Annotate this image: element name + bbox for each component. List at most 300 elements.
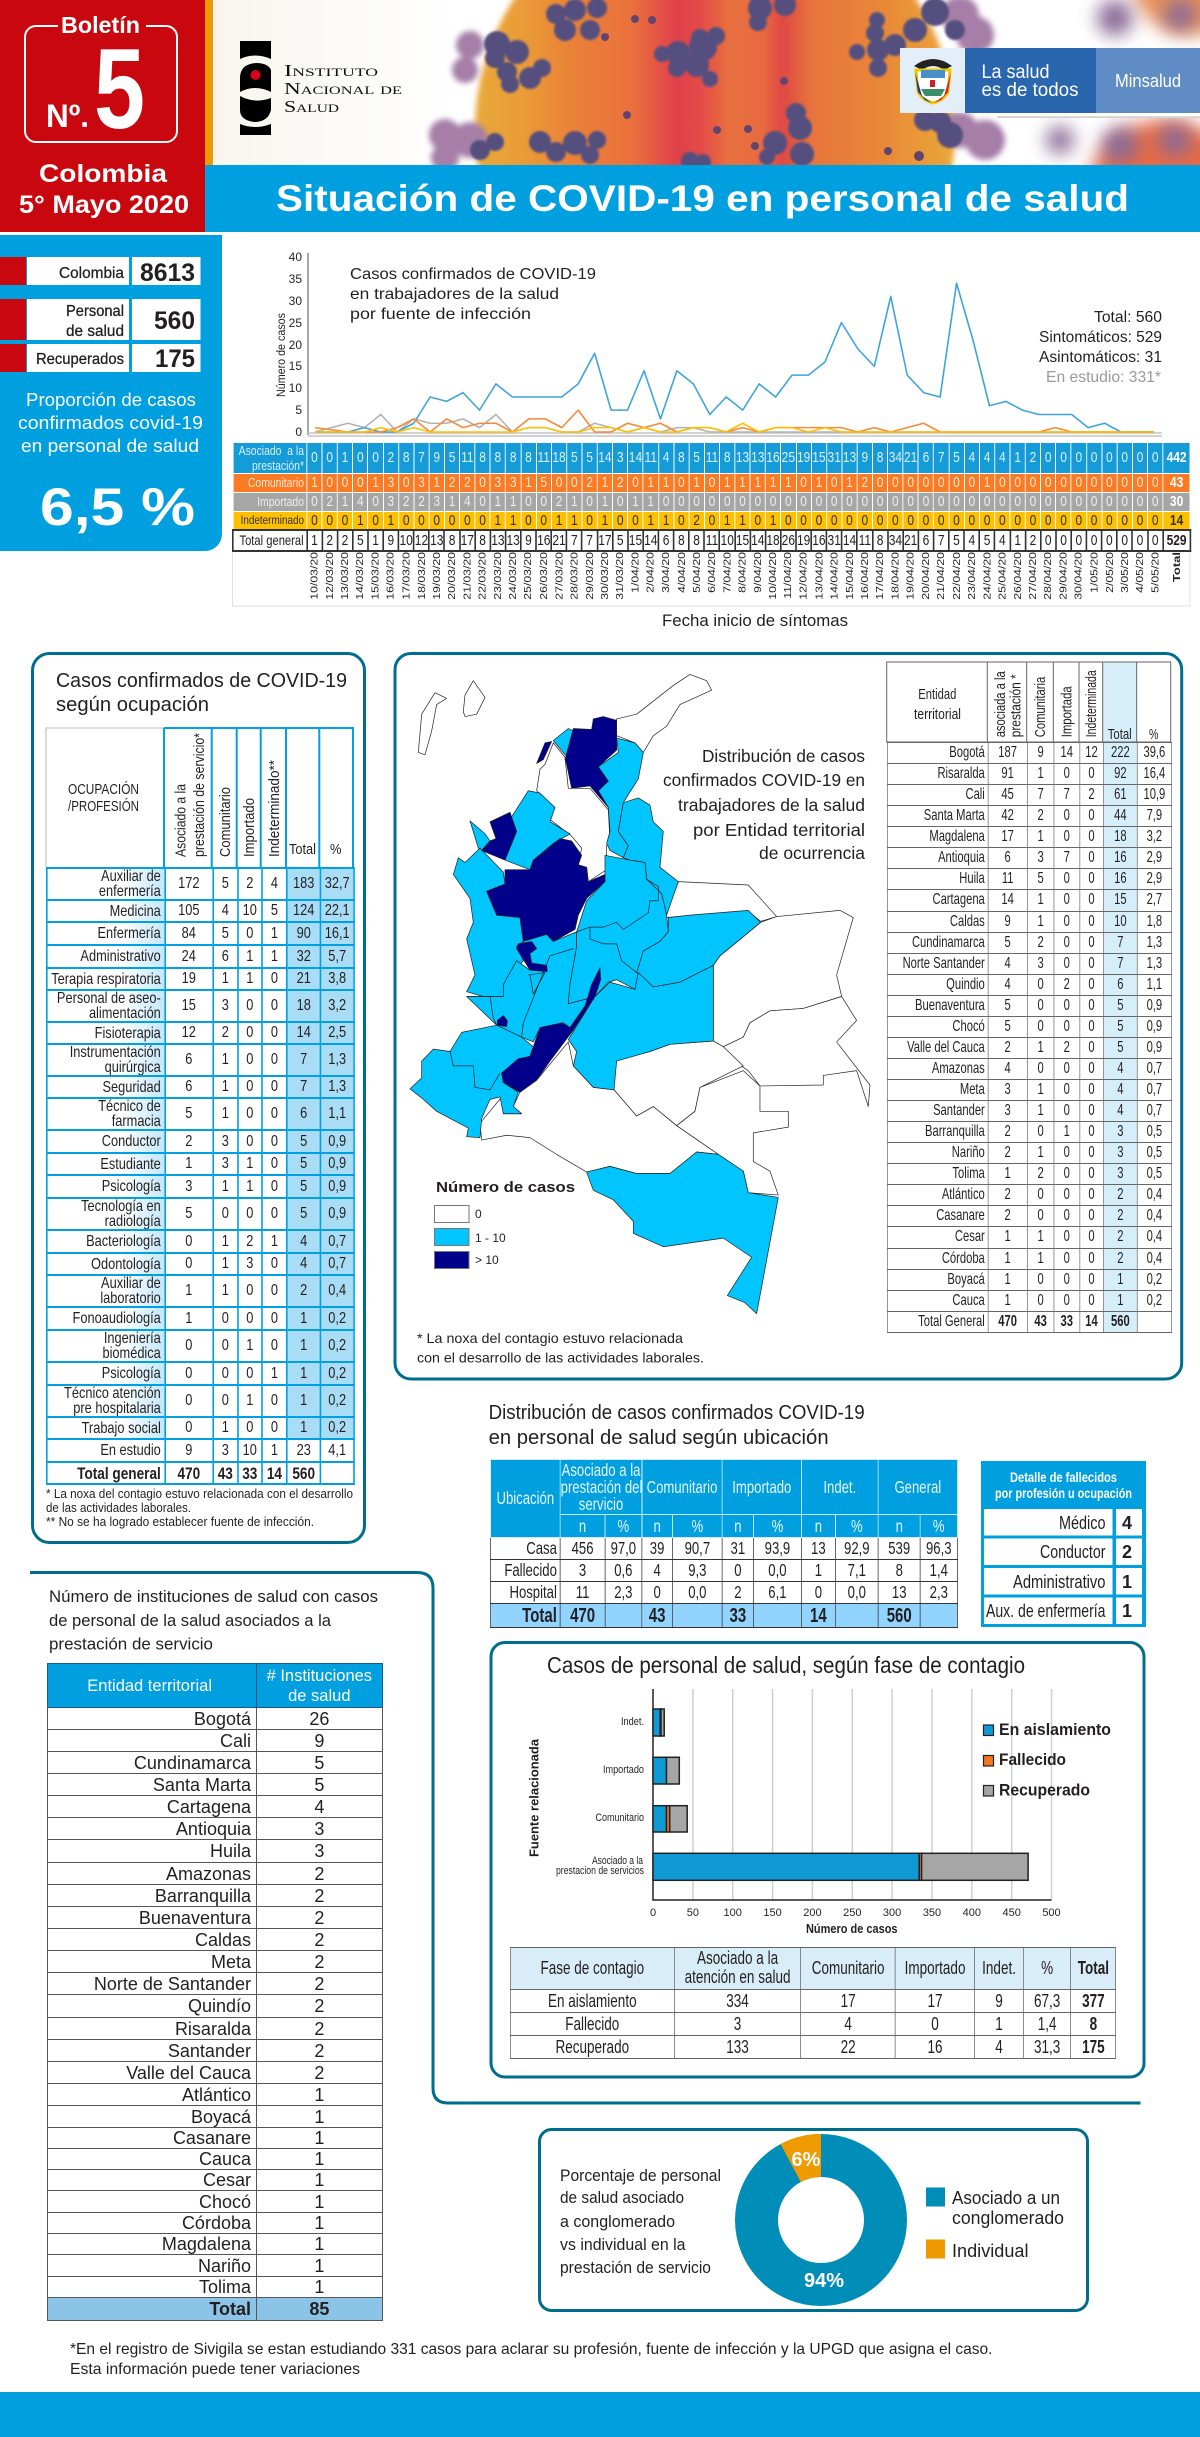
table: daily counts by source: 1 — [632, 493, 639, 510]
table: occupations: 0,4 — [328, 1282, 346, 1299]
territorial table header: % — [1149, 726, 1158, 743]
table: daily counts by source: 0 — [326, 512, 333, 529]
table: cases by territorial entity: 3 — [1004, 1081, 1010, 1098]
table: daily counts by source: 0 — [923, 493, 929, 510]
table: daily counts by source: 0 — [831, 493, 838, 510]
table: institutions: Huila — [210, 1841, 251, 1861]
table: institutions: Cauca — [199, 2149, 251, 2169]
table: occupations: 0 — [271, 1392, 278, 1409]
table: cases by territorial entity: 0 — [1088, 1292, 1094, 1309]
table: daily counts by source: 0 — [525, 512, 532, 529]
table: cases by territorial entity: 0 — [1088, 1060, 1094, 1077]
table: occupations: 19 — [181, 970, 196, 987]
table: cases by territorial entity: 0 — [1088, 1081, 1094, 1098]
table: daily counts by source: 5 — [586, 449, 593, 466]
table: daily counts by source: 0 — [1045, 512, 1052, 529]
table: daily counts by source: 25 — [782, 449, 795, 466]
line chart: cases by source of infection: 10 — [289, 381, 302, 395]
table: cases by territorial entity: 0 — [1063, 828, 1070, 845]
table: cases by territorial entity: 0 — [1063, 1228, 1070, 1245]
table: daily counts by source: 1 — [816, 474, 822, 491]
map legend: > 10 — [475, 1253, 499, 1267]
table: cases by territorial entity: Antioquia — [938, 849, 984, 866]
table: daily counts by source: 3/04/20 — [660, 552, 672, 593]
table: daily counts by source: 26 — [782, 532, 795, 549]
description text: de salud asociado — [560, 2188, 684, 2207]
heading: Distribución de casos confirmados COVID-19 — [489, 1402, 865, 1424]
table: daily counts by source: 11 — [859, 532, 871, 549]
table: daily counts by source: 23/04/20 — [966, 552, 977, 600]
table: cases by territorial entity: 6 — [1004, 849, 1010, 866]
table: daily counts by source: 10/04/20 — [767, 552, 779, 600]
table: daily counts by source: 11/04/20 — [783, 552, 794, 599]
table: daily counts by source: 0 — [1121, 493, 1128, 510]
red bulletin block: Nº. — [46, 98, 89, 134]
stacked bar chart: 200 — [803, 1907, 822, 1919]
table: daily counts by source: 0 — [724, 493, 731, 510]
panel: cases by occupation — [31, 652, 366, 1544]
table: daily counts by source: 1 — [754, 474, 761, 491]
table: daily counts by source: 1 — [739, 512, 746, 529]
table: contagion phase: 3 — [734, 2014, 742, 2034]
line chart: cases by source of infection: 25 — [289, 316, 302, 330]
table: daily counts by source: 0 — [617, 512, 624, 529]
table: occupations: 0 — [221, 1364, 229, 1382]
table: location: Hospital — [509, 1582, 556, 1602]
table: cases by territorial entity: Córdoba — [942, 1250, 984, 1267]
line chart: cases by source of infection — [276, 250, 1162, 439]
table: institutions: Córdoba — [182, 2213, 251, 2233]
stacked bar chart: Asociado a la — [592, 1855, 644, 1867]
table: location: 8 — [895, 1560, 902, 1580]
table: occupations: 0 — [246, 1205, 253, 1222]
table: location: Casa — [526, 1538, 556, 1558]
table: daily counts by source: 4 — [464, 493, 471, 510]
table: occupations: 4 — [300, 1255, 307, 1272]
table: occupations: 0 — [271, 997, 278, 1014]
table: daily counts by source: 28/04/20 — [1043, 552, 1054, 600]
table: daily counts by source: 529 — [1167, 532, 1187, 549]
table: institutions: 2 — [314, 1974, 324, 1994]
line chart: cases by source of infection: Número de casos — [276, 313, 288, 397]
table: daily counts by source: 4/04/20 — [676, 552, 687, 593]
table: daily counts by source: 18 — [766, 532, 780, 549]
table: daily counts by source: 9/04/20 — [752, 552, 763, 593]
table: daily counts by source: 17/04/20 — [874, 552, 886, 600]
table: daily counts by source: 2 — [1030, 449, 1036, 466]
table: cases by territorial entity: 11 — [1002, 870, 1013, 887]
table: cases by territorial entity: 33 — [1060, 1313, 1073, 1330]
donut legend: Individual — [952, 2241, 1028, 2261]
table: occupations: Auxiliar de — [101, 1275, 160, 1292]
table: daily counts by source: 0 — [678, 493, 685, 510]
box heading: por profesión u ocupación — [995, 1485, 1132, 1501]
table: cases by territorial entity: 0,9 — [1146, 1018, 1162, 1035]
chart title: Casos confirmados de COVID-19 — [350, 266, 596, 283]
table: daily counts by source: 0 — [311, 512, 318, 529]
table: contagion phase: 17 — [928, 1991, 943, 2011]
table: cases by territorial entity: 0 — [1063, 1250, 1070, 1267]
row: Administrativo 1: Administrativo — [1013, 1572, 1106, 1592]
table: location: 97,0 — [610, 1538, 636, 1558]
table: daily counts by source: 1 — [510, 493, 517, 510]
table: cases by territorial entity: Cauca — [952, 1292, 984, 1309]
table: daily counts by source: 0 — [1060, 532, 1067, 549]
figure: recuperados 175: 175 — [155, 345, 195, 373]
table: institutions: 1 — [314, 2277, 324, 2297]
table: cases by territorial entity: 0 — [1063, 1144, 1070, 1161]
table: contagion phase: 133 — [727, 2037, 749, 2057]
table: location: 3 — [578, 1560, 586, 1580]
table: daily counts by source: 0 — [678, 512, 685, 529]
table: institutions: Caldas — [195, 1930, 251, 1950]
table: institutions: Buenaventura — [139, 1908, 251, 1928]
table: daily counts by source: 31 — [828, 532, 841, 549]
table: contagion phase: 22 — [841, 2037, 856, 2057]
table: daily counts by source: 2 — [693, 512, 700, 529]
table: cases by territorial entity: Risaralda — [937, 765, 984, 782]
table: daily counts by source: 10 — [399, 532, 413, 549]
table: contagion phase: 31,3 — [1034, 2037, 1061, 2057]
table: occupations: 22,1 — [324, 902, 349, 919]
table: location: Ubicación — [496, 1488, 554, 1508]
table: institutions: 2 — [314, 1886, 324, 1906]
table: occupations: 5 — [300, 1132, 307, 1150]
table: occupations: 0 — [185, 1364, 192, 1382]
table: daily counts by source: 15/04/20 — [844, 552, 855, 600]
table: daily counts by source: 1 — [342, 449, 348, 466]
table: daily counts by source: 29/03/20 — [584, 552, 595, 600]
table: daily counts by source: 0 — [540, 493, 547, 510]
table: daily counts by source: 0 — [785, 512, 792, 529]
table: daily counts by source: 0 — [1091, 474, 1097, 491]
table: occupations: 0 — [271, 1205, 278, 1222]
table: daily counts by source: 0 — [1121, 512, 1128, 529]
table: cases by territorial entity: Cundinamarca — [912, 934, 984, 951]
table: daily counts by source: 12/04/20 — [798, 552, 809, 600]
table: contagion phase: Total — [1078, 1958, 1109, 1978]
table: daily counts by source: 0 — [754, 493, 761, 510]
table: occupations: 1 — [300, 1419, 307, 1436]
table: location: % — [850, 1516, 862, 1536]
table: daily counts by source: 1 — [602, 474, 608, 491]
table: cases by territorial entity: 222 — [1111, 744, 1129, 761]
table: daily counts by source: 0 — [800, 474, 807, 491]
figure: recuperados 175 — [0, 344, 200, 373]
table: daily counts by source: 0 — [1152, 474, 1159, 491]
table: occupations: 12 — [181, 1024, 196, 1041]
table: daily counts by source: 1 — [372, 474, 379, 491]
table: daily counts by source: 0 — [1030, 493, 1036, 510]
table: daily counts by source: 1 — [311, 474, 318, 491]
table: daily counts by source: 20/04/20 — [920, 552, 931, 600]
stacked bar chart: 150 — [763, 1907, 782, 1919]
table: occupations: 0 — [246, 1132, 253, 1150]
table: occupations: 0,2 — [328, 1392, 346, 1409]
table: daily counts by source: 1 — [525, 474, 532, 491]
table: cases by territorial entity: 0,7 — [1146, 1060, 1162, 1077]
table: institutions: 1 — [314, 2149, 324, 2169]
table: location: % — [691, 1516, 703, 1536]
table: daily counts by source: 4 — [663, 449, 669, 466]
table: location: 2,3 — [929, 1582, 947, 1602]
table: daily counts by source: 4 — [984, 449, 990, 466]
table: daily counts by source: 6 — [923, 449, 929, 466]
table: occupations: 43 — [217, 1464, 233, 1482]
table: location: 0,0 — [768, 1560, 786, 1580]
table: daily counts by source: 0 — [907, 474, 914, 491]
table: daily counts by source: 2 — [326, 493, 333, 510]
table: occupations: 0 — [271, 1024, 278, 1041]
table: daily counts by source: 8 — [877, 532, 883, 549]
table: location: 13 — [811, 1538, 825, 1558]
row: Médico 4: 4 — [1122, 1513, 1132, 1533]
table: occupations: 2 — [221, 1024, 229, 1041]
table: daily counts by source: 1 — [342, 493, 348, 510]
table: daily counts by source: 0 — [1091, 449, 1097, 466]
table: cases by territorial entity: 1 — [1004, 1165, 1010, 1182]
table: daily counts by source: 3/05/20 — [1119, 552, 1130, 593]
table: cases by territorial entity: 0,5 — [1146, 1144, 1162, 1161]
table: occupations: 0 — [185, 1337, 192, 1354]
table: occupations: Conductor — [101, 1133, 160, 1150]
table: daily counts by source: 1 — [357, 512, 364, 529]
table: occupations: 105 — [178, 902, 199, 919]
table: cases by territorial entity: Norte Santander — [902, 955, 984, 972]
table: daily counts by source: 7/04/20 — [722, 552, 733, 593]
table: daily counts by source: 0 — [1106, 493, 1113, 510]
table: occupations: 4 — [271, 875, 278, 892]
table: cases by territorial entity: 39,6 — [1143, 744, 1165, 761]
table: daily counts by source: 14 — [644, 532, 657, 549]
table: cases by territorial entity: 0 — [1063, 1060, 1070, 1077]
table: daily counts by source: 2 — [388, 449, 394, 466]
table: occupations: 1 — [271, 1442, 278, 1458]
table: daily counts by source: 4 — [999, 532, 1006, 549]
table: daily counts by source: 0 — [342, 474, 348, 491]
panel: cases by contagion phase — [490, 1641, 1146, 2078]
table: daily counts by source: 9 — [433, 449, 440, 466]
stacked bar chart: Importado — [603, 1764, 644, 1776]
table: daily counts by source: 1 — [693, 474, 700, 491]
table: daily counts by source: 0 — [1075, 493, 1082, 510]
table: contagion phase: 1,4 — [1038, 2014, 1057, 2034]
table: daily counts by source: Total general — [239, 532, 304, 548]
table: institutions: 1 — [314, 2256, 324, 2276]
table: cases by territorial entity: 0 — [1037, 1018, 1043, 1035]
table: occupations: Odontología — [91, 1256, 160, 1272]
table: occupations: Ingeniería — [104, 1330, 160, 1347]
table: cases by territorial entity: 2 — [1063, 976, 1070, 993]
stacked bar chart: Número de casos — [806, 1921, 898, 1936]
stacked bar chart: 100 — [724, 1907, 742, 1919]
table: daily counts by source: 7 — [938, 449, 945, 466]
footnotes: de las actividades laborales. — [46, 1501, 191, 1515]
table: contagion phase: 16 — [928, 2037, 943, 2057]
table: location: 0 — [734, 1560, 741, 1580]
table: cases by territorial entity: Casanare — [936, 1207, 984, 1224]
table: cases by territorial entity: 1 — [1037, 891, 1043, 908]
table: daily counts by source: 0 — [984, 493, 990, 510]
table: daily counts by source: 24/03/20 — [507, 552, 519, 600]
table: daily counts by source: 13 — [736, 449, 749, 466]
table: occupations: 3,2 — [328, 997, 346, 1014]
table: daily counts by source: 0 — [1075, 449, 1082, 466]
table: cases by territorial entity: Santander — [933, 1102, 984, 1119]
table: daily counts by source: 0 — [1030, 512, 1036, 529]
table: cases by territorial entity: 0 — [1088, 1165, 1094, 1182]
table: cases by territorial entity: 3 — [1117, 1123, 1123, 1140]
table: occupations: 1 — [271, 1364, 278, 1382]
table: institutions: Casanare — [173, 2128, 251, 2148]
table: location: n — [895, 1516, 902, 1536]
table: daily counts by source: 19 — [797, 449, 810, 466]
table: occupations: 1 — [300, 1364, 307, 1382]
table: occupations: 1 — [271, 1232, 278, 1250]
table: cases by territorial entity: 7 — [1063, 849, 1070, 866]
table: cases by territorial entity: 1 — [1037, 1250, 1043, 1267]
table: institutions: Chocó — [199, 2192, 251, 2212]
table: daily counts by source: 16/03/20 — [385, 552, 396, 600]
table: daily counts by source: 0 — [1014, 474, 1021, 491]
table: daily counts by source: 5/04/20 — [691, 552, 702, 593]
table: occupations: 0 — [271, 1255, 278, 1272]
table: daily counts by source: 0 — [1091, 512, 1097, 529]
table: location: n — [734, 1516, 741, 1536]
table: occupations: 1 — [271, 948, 278, 964]
table: occupations: 0,7 — [328, 1232, 346, 1250]
table: cases by territorial entity: 0 — [1088, 765, 1094, 782]
table: cases by territorial entity: 9 — [1037, 744, 1043, 761]
table: daily counts by source: 4 — [357, 493, 364, 510]
line chart: cases by source of infection: 30 — [289, 294, 302, 308]
table: occupations: 1 — [185, 1155, 192, 1172]
table: occupations: 21 — [296, 970, 311, 987]
table: location: 1,4 — [929, 1560, 947, 1580]
table: contagion phase: 17 — [841, 1991, 856, 2011]
table: occupations: 1 — [271, 924, 278, 942]
title bar — [205, 165, 1200, 232]
heading — [49, 1587, 378, 1654]
table: daily counts by source: 21/04/20 — [936, 552, 947, 600]
icon: coat of arms — [914, 59, 952, 103]
figure: recuperados 175: Recuperados — [36, 351, 124, 368]
table header: Asociado a la — [173, 783, 190, 857]
table: institutions: 1 — [314, 2213, 324, 2233]
table: cases by territorial entity: 0,7 — [1146, 1081, 1162, 1098]
table: daily counts by source: 0 — [586, 493, 593, 510]
table: occupations: 1 — [221, 1282, 229, 1299]
table: cases by territorial entity: 5 — [1117, 1018, 1123, 1035]
table: daily counts by source: 34 — [889, 449, 902, 466]
table: cases by territorial entity: 0 — [1037, 1060, 1043, 1077]
table: cases by territorial entity: 0 — [1037, 1292, 1043, 1309]
table: cases by territorial entity: Cali — [965, 786, 984, 803]
table: daily counts by source: 4/05/20 — [1134, 552, 1145, 593]
table: cases by territorial entity: 0 — [1088, 828, 1094, 845]
table: occupations: 1,3 — [328, 1051, 346, 1068]
table: occupations: Psicología — [101, 1178, 160, 1195]
table: occupations: 1 — [185, 1310, 192, 1326]
table: location: 0 — [653, 1582, 660, 1602]
stacked bar chart: 350 — [923, 1907, 941, 1919]
chart legend: En aislamiento — [999, 1720, 1111, 1739]
table: daily counts by source: 3 — [388, 474, 394, 491]
table: daily counts by source: 0 — [632, 512, 639, 529]
stacked bar chart: 0 — [650, 1907, 656, 1919]
table: occupations: 0,2 — [328, 1419, 346, 1436]
table: cases by territorial entity: 4 — [1117, 1060, 1123, 1077]
table: institutions: 85 — [309, 2299, 329, 2319]
stacked bar chart: Fuente relacionada — [526, 1738, 542, 1857]
table: daily counts by source: 0 — [1045, 493, 1052, 510]
table: daily counts by source: 0 — [984, 512, 990, 529]
map heading — [663, 746, 865, 863]
table: daily counts by source: 0 — [403, 474, 410, 491]
table: daily counts by source: 13 — [430, 532, 443, 549]
table: contagion phase: Fallecido — [566, 2014, 620, 2034]
table: cases by territorial entity: 470 — [998, 1313, 1017, 1330]
table: daily counts by source: 8 — [724, 449, 731, 466]
heading: de personal de la salud asociados a la — [49, 1611, 332, 1630]
map heading: Distribución de casos — [702, 746, 865, 766]
table: occupations: 3 — [221, 1132, 229, 1150]
table: institutions: Bogotá — [194, 1708, 251, 1728]
table: cases by territorial entity: 2 — [1088, 786, 1094, 803]
table: occupations: 0 — [271, 1051, 278, 1068]
table: occupations: 0 — [271, 1419, 278, 1436]
table: occupations: 2 — [246, 1232, 253, 1250]
table: occupations: 24 — [181, 948, 196, 964]
table: daily counts by source: 43 — [1170, 474, 1183, 491]
table: cases by territorial entity: 1,3 — [1146, 934, 1162, 951]
table: daily counts by source: 4 — [968, 449, 975, 466]
panel: deaths by occupation — [981, 1461, 1146, 1627]
table: daily counts by source: 0 — [1091, 493, 1097, 510]
table: contagion phase: atención en salud — [685, 1967, 791, 1987]
table: daily counts by source: 25/03/20 — [523, 552, 534, 600]
table: cases by territorial entity: 1 — [1037, 1102, 1043, 1119]
table: occupations: Fisioterapia — [94, 1024, 160, 1042]
stacked bar chart: 450 — [1003, 1907, 1021, 1919]
table: cases by territorial entity: 16 — [1114, 870, 1126, 887]
table: cases by territorial entity: 43 — [1034, 1313, 1047, 1330]
table: contagion phase: Indet. — [983, 1958, 1016, 1978]
table: daily counts by source: 2 — [326, 532, 333, 549]
table: daily counts by source: 1 — [785, 474, 792, 491]
table: location: 456 — [571, 1538, 593, 1558]
table: occupations: 0 — [246, 1419, 253, 1436]
table: cases by territorial entity: 0 — [1063, 955, 1070, 972]
table: daily counts by source: 1 — [770, 512, 776, 529]
table: daily counts by source: 1 — [663, 512, 669, 529]
table: daily counts by source: 0 — [968, 474, 975, 491]
table: cases by territorial entity: 0 — [1063, 934, 1070, 951]
table: institutions: 2 — [314, 1864, 324, 1884]
table: occupations: 0,9 — [328, 1132, 346, 1150]
table: occupations: 3,8 — [328, 970, 346, 987]
table: daily counts by source: 0 — [861, 512, 868, 529]
table: occupations: 470 — [177, 1464, 200, 1482]
table: institutions: 5 — [314, 1774, 324, 1794]
table: daily counts by source: 0 — [525, 493, 532, 510]
territorial table header — [887, 662, 1171, 743]
table: cases by territorial entity: 0 — [1088, 1186, 1094, 1203]
table: cases by territorial entity: 61 — [1114, 786, 1126, 803]
table: daily counts by source: 0 — [938, 474, 945, 491]
text: proportion caption: Proporción de casos — [26, 390, 196, 410]
table: occupations: 10 — [242, 902, 257, 919]
